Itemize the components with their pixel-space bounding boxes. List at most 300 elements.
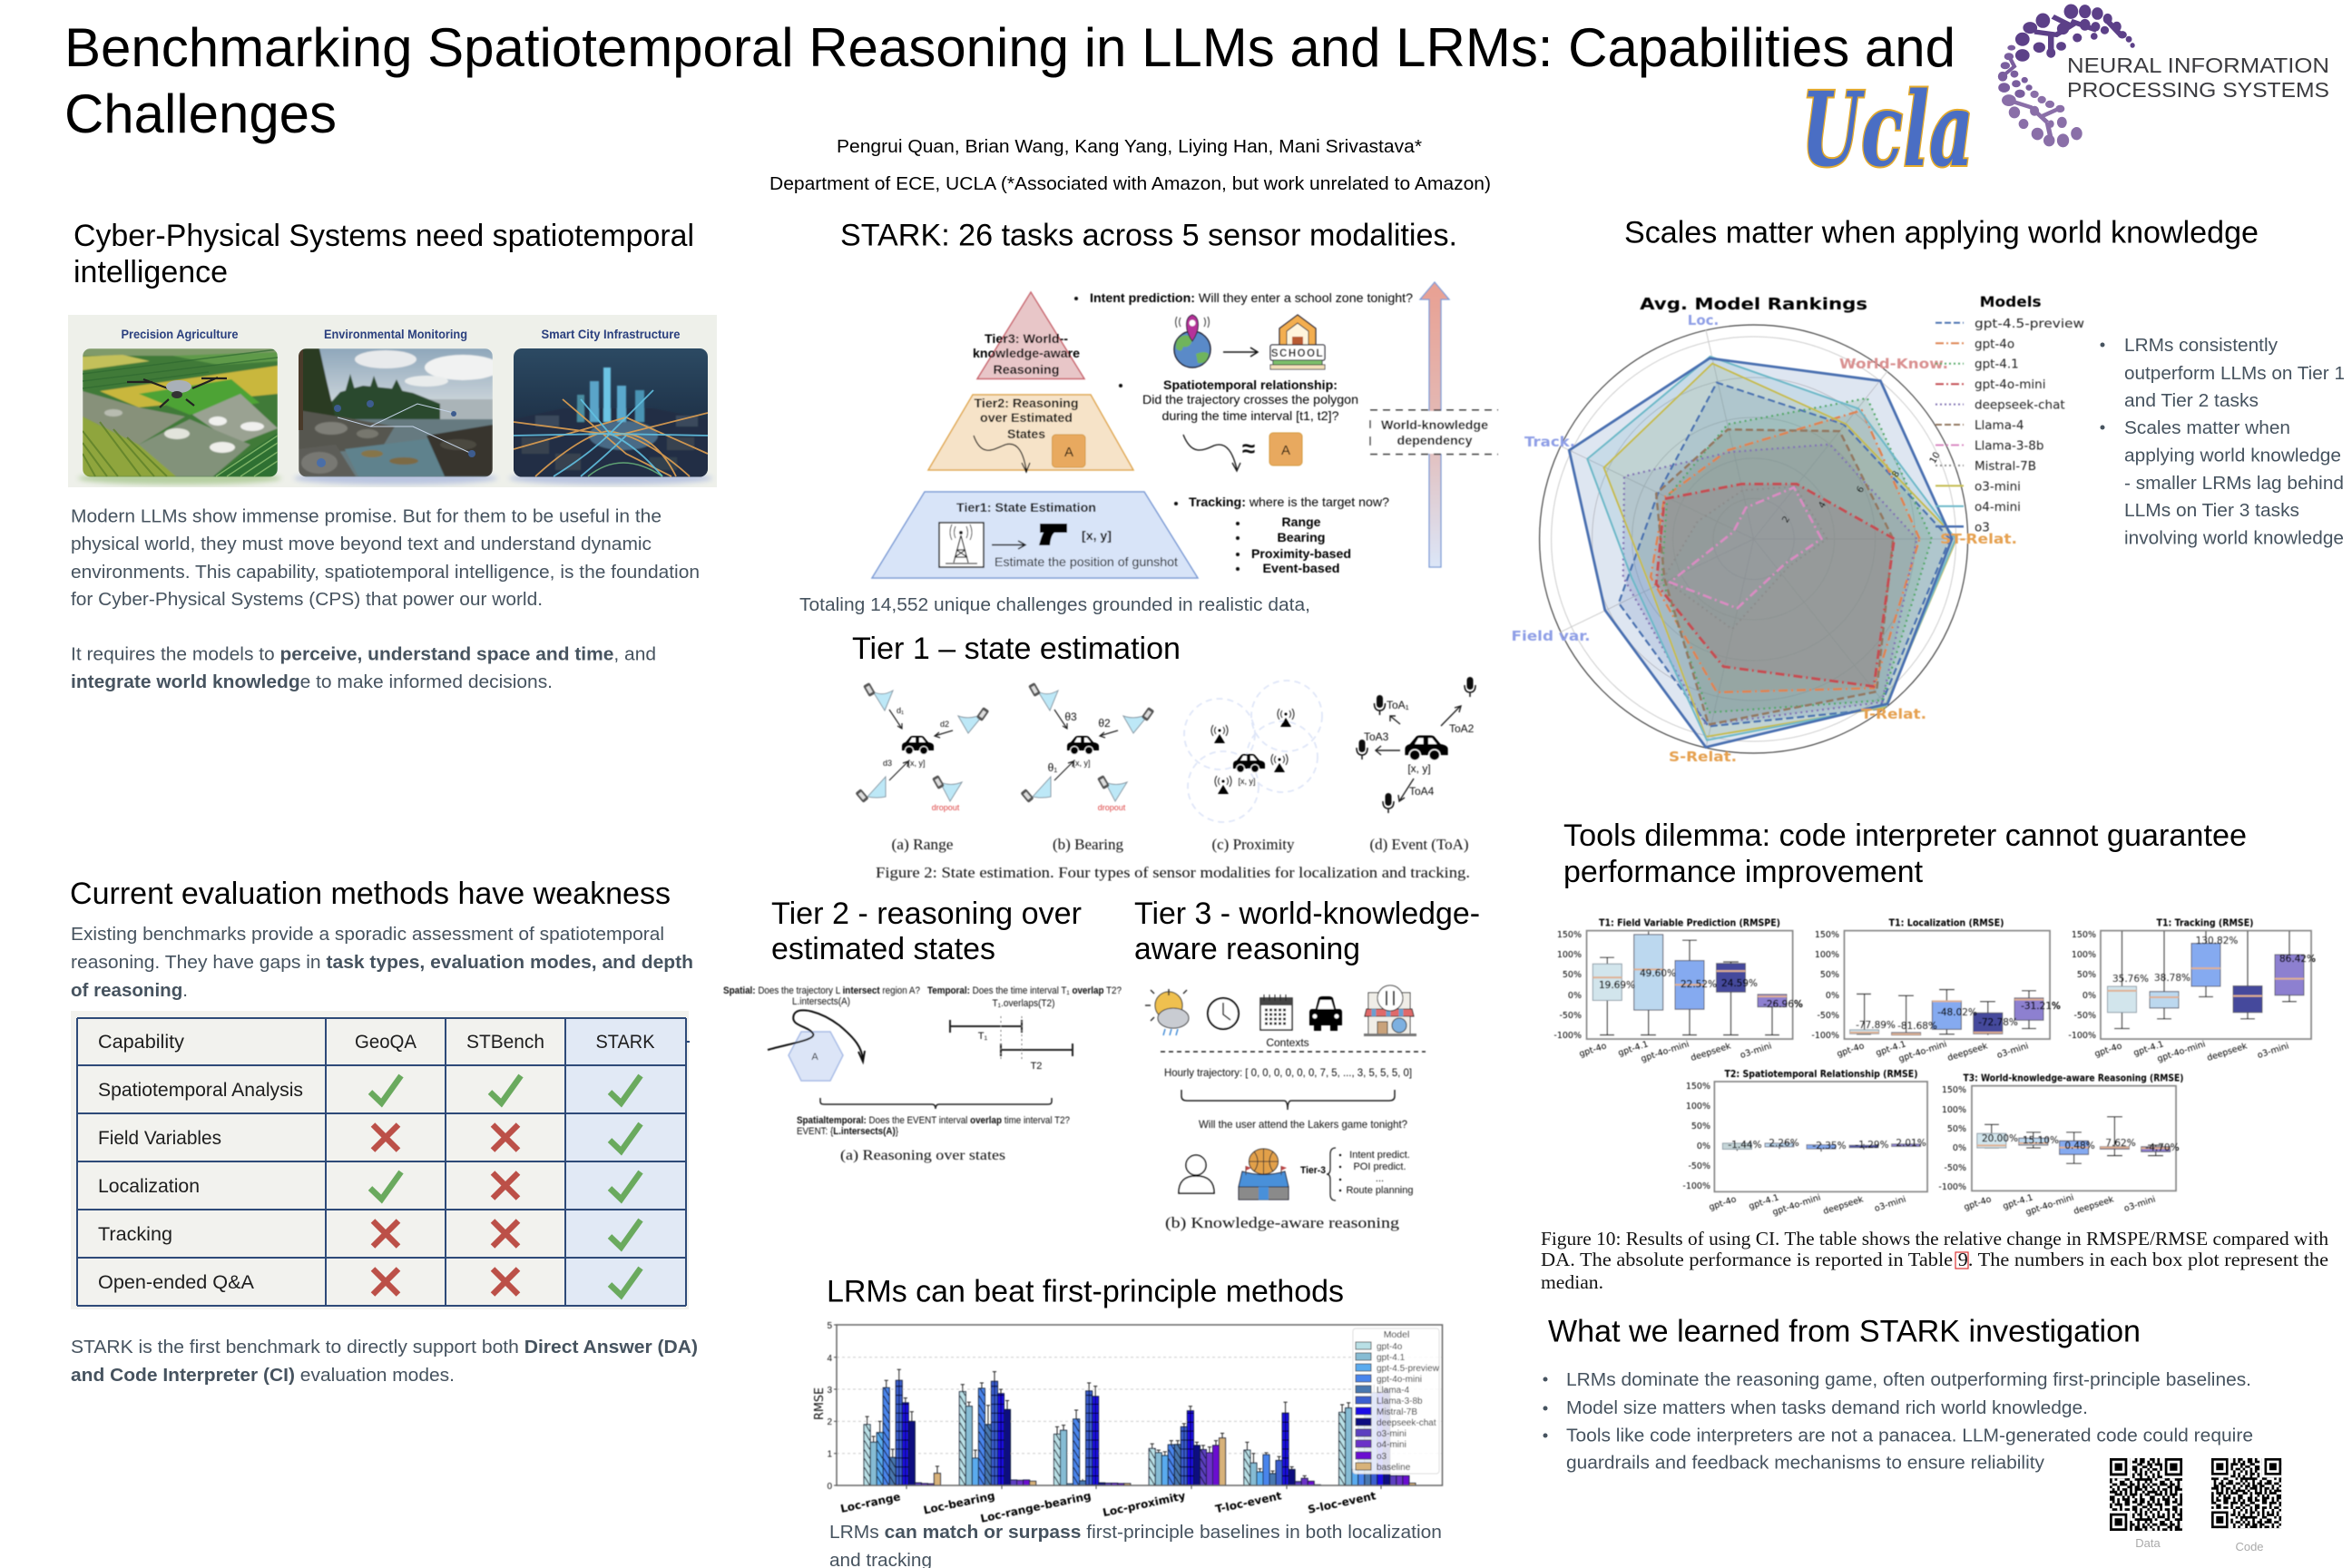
- tracking list: Event-based: [1263, 561, 1339, 575]
- box plot: T1 field variable: T1: Field Variable Prediction (RMSPE): [1599, 917, 1780, 929]
- chart legend: o3: [1377, 1452, 1387, 1462]
- chart legend: baseline: [1377, 1463, 1411, 1473]
- icon: clock: [1208, 998, 1239, 1029]
- axis labels: [1512, 312, 2017, 765]
- bullets: lessons learned: LRMs dominate the reasoning game, often outperforming first-principle baselines.: [1566, 1370, 2251, 1390]
- legend: models: deepseek-chat: [1975, 398, 2065, 413]
- box plot: T2 spatiotemporal relationship: 50%: [1691, 1122, 1710, 1132]
- box plot: T1 localization: 50%: [1820, 970, 1839, 980]
- box plot: T2 spatiotemporal relationship: o3-mini: [1873, 1194, 1907, 1214]
- axis labels: World-Know.: [1839, 356, 1948, 372]
- body text: modern LLMs: It requires the models to perceive, understand space and time , and: [71, 644, 656, 664]
- diagram: range: d3: [883, 759, 892, 768]
- icon: trajectory approximates region: A: [1281, 443, 1290, 458]
- brace and spatiotemporal question: Spatialtemporal: Does the EVENT interval overlap time interval T2?: [797, 1115, 1070, 1126]
- body text: STARK is the first: STARK is the first benchmark to directly support both Direct Answer (DA): [71, 1338, 698, 1357]
- legend: models: gpt-4o: [1975, 337, 2014, 351]
- box plot: T2 spatiotemporal relationship: gpt-4o: [1708, 1194, 1738, 1212]
- diagram: bearing: θ₁: [1048, 761, 1057, 774]
- heading: Tier 2: [771, 897, 1082, 966]
- tracking list: [1174, 495, 1389, 575]
- box plot: T1 tracking: 50%: [2077, 970, 2096, 980]
- tracking list: Range: [1281, 514, 1321, 529]
- tier 2 trapezoid: A: [1064, 445, 1073, 460]
- authors and affiliation: Pengrui Quan, Brian Wang, Kang Yang, Liying Han, Mani Srivastava*: [837, 137, 1422, 157]
- body text: existing benchmarks: of reasoning.: [71, 981, 188, 1001]
- box plot: T2 spatiotemporal relationship: -1.29%: [1855, 1140, 1889, 1151]
- body text: existing benchmarks: [71, 925, 693, 1001]
- photo: precision agriculture: [83, 348, 278, 477]
- box plot: T1 localization: 150%: [1815, 930, 1839, 940]
- heading: STARK: STARK: 26 tasks across 5 sensor modalities.: [840, 218, 1457, 252]
- radar chart: average model rankings: [1512, 293, 2084, 765]
- chart axes: Loc-range: [839, 1490, 902, 1515]
- icon: trajectory approximates region: [1183, 433, 1302, 471]
- box plot: T2 spatiotemporal relationship: [1682, 1068, 1927, 1218]
- question: Will the user attend the Lakers game tonight?: [1199, 1118, 1407, 1131]
- tier-3 list: Route planning: [1346, 1185, 1414, 1196]
- chart axes: 0: [827, 1482, 832, 1492]
- temporal question: T₁: [978, 1031, 988, 1042]
- tier 2 trapezoid: [928, 395, 1133, 472]
- table row labels: Spatiotemporal Analysis: [98, 1080, 303, 1101]
- body text: STARK is the first: [71, 1338, 698, 1386]
- icon: restaurant: [1364, 985, 1416, 1036]
- legend: models: gpt-4o-mini: [1975, 377, 2045, 392]
- figure: reasoning over states: [723, 985, 1122, 1163]
- title: [64, 17, 1955, 144]
- body text: existing benchmarks: Existing benchmarks provide a sporadic assessment of spatiotemporal: [71, 925, 664, 945]
- chart axes: 5: [827, 1321, 832, 1331]
- brace and spatiotemporal question: [797, 1098, 1070, 1137]
- icon: trajectory approximates region: ≈: [1242, 435, 1255, 462]
- panel: Tier 3: [1134, 897, 1480, 1231]
- box plot: T3 world-knowledge-aware reasoning: 7.62%: [2105, 1138, 2136, 1149]
- icon: globe with pin: [1174, 315, 1210, 368]
- box plot: T1 field variable: 100%: [1557, 950, 1582, 960]
- bullets: lessons learned: Model size matters when tasks demand rich world knowledge.: [1566, 1398, 2088, 1418]
- spatiotemporal relationship text: during the time interval [t1, t2]?: [1161, 408, 1339, 423]
- tier-3 list: ...: [1376, 1173, 1384, 1184]
- box plot: T1 field variable: 22.52%: [1681, 979, 1717, 990]
- title: Challenges: [64, 83, 337, 144]
- panel: What we learned: [1543, 1314, 2281, 1553]
- bars: groups: [864, 1369, 1416, 1485]
- box plot: T1 tracking: [2068, 917, 2316, 1064]
- heading: current evaluation methods: Current evaluation methods have weakness: [70, 877, 671, 911]
- box plot: T1 localization: -81.68%: [1897, 1021, 1937, 1032]
- table marks: check and cross icons: [370, 1076, 641, 1296]
- box plot: T1 localization: T1: Localization (RMSE): [1889, 917, 2004, 929]
- box plot: T1 field variable: -26.96%: [1763, 999, 1803, 1010]
- panel: Tier 1 state estimation: [852, 632, 1475, 881]
- icon: school: SCHOOL: [1271, 348, 1324, 359]
- box plot: T1 field variable: 19.69%: [1599, 980, 1635, 991]
- diagram: proximity: [1184, 681, 1322, 822]
- legend: models: [1936, 293, 2084, 534]
- radial ticks: 10: [1928, 450, 1943, 466]
- bullets: lessons learned: guardrails and feedback mechanisms to ensure reliability: [1566, 1454, 2044, 1474]
- radial ticks: 8: [1890, 469, 1902, 479]
- tier 2 trapezoid: Tier2: Reasoning: [975, 396, 1078, 410]
- box plot: T3 world-knowledge-aware reasoning: 20.00%: [1982, 1133, 2018, 1144]
- radial ticks: 2: [1780, 514, 1792, 524]
- box plot: T1 tracking: 38.78%: [2154, 973, 2190, 984]
- legend: models: o3: [1975, 520, 1990, 534]
- body text: existing benchmarks: reasoning. They have gaps in task types, evaluation modes, and depth: [71, 953, 693, 973]
- figure 10 caption: median.: [1541, 1271, 1603, 1293]
- heading: Tier 3: aware reasoning: [1134, 932, 1360, 966]
- photo: environmental monitoring: [299, 348, 501, 477]
- body text: modern LLMs: [71, 506, 700, 692]
- caption (b): (b) Knowledge-aware reasoning: [1165, 1214, 1400, 1231]
- arrow: world-knowledge dependency: [1366, 282, 1502, 567]
- diagram: range: dropout: [932, 803, 960, 812]
- box plot: T2 spatiotemporal relationship: -50%: [1688, 1161, 1710, 1171]
- box plot: T1 localization: -31.21%: [2021, 1001, 2061, 1012]
- table row labels: Tracking: [98, 1224, 172, 1245]
- bar chart: RMSE by task: [813, 1321, 1443, 1525]
- icon: calendar: [1260, 995, 1292, 1030]
- box plot: T3 world-knowledge-aware reasoning: 50%: [1947, 1124, 1966, 1134]
- QR code: data: [2110, 1458, 2182, 1550]
- chart axes: Loc-proximity: [1102, 1489, 1187, 1519]
- spatial question: A: [811, 1052, 818, 1063]
- bullets: LRM takeaways: and Tier 2 tasks: [2124, 391, 2259, 411]
- box plot: T3 world-knowledge-aware reasoning: gpt-4o: [1963, 1194, 1993, 1212]
- legend: models: Llama-3-8b: [1975, 439, 2043, 454]
- box plot: T3 world-knowledge-aware reasoning: gpt-4.1: [2002, 1192, 2034, 1211]
- heading: tools dilemma: Tools dilemma: code interpreter cannot guarantee: [1563, 818, 2247, 853]
- photo: smart city: [514, 348, 708, 477]
- box plot: T2 spatiotemporal relationship: -1.44%: [1728, 1140, 1762, 1151]
- image strip: CPS applications: Precision Agriculture: [122, 328, 239, 341]
- chart axes: T-loc-event: [1214, 1489, 1283, 1515]
- body text: modern LLMs: environments. This capability, spatiotemporal intelligence, is the foundation: [71, 563, 700, 583]
- box plot: T2 spatiotemporal relationship: -2.35%: [1812, 1141, 1847, 1152]
- heading: scales matter: Scales matter when applying world knowledge: [1624, 216, 2259, 250]
- figure 10 caption: [1541, 1228, 2329, 1293]
- figure 10 caption: Figure 10: Results of using CI. The table shows the relative change in RMSPE/RMSE compared with: [1541, 1228, 2329, 1250]
- icon: stadium with basketball: [1239, 1149, 1289, 1200]
- axis labels: Loc.: [1688, 312, 1719, 328]
- QR code: code: [2211, 1458, 2281, 1553]
- body text: LRMs can match: LRMs can match or surpass first-principle baselines in both localization: [829, 1523, 1442, 1543]
- brace: [1181, 1090, 1395, 1110]
- temporal question: Temporal: Does the time interval T₁ overlap T2?: [927, 985, 1122, 996]
- panel: STARK tasks: [799, 218, 1502, 615]
- heading: Tier 3: Tier 3 - world-knowledge-: [1134, 897, 1480, 931]
- box plot: T1 field variable: gpt-4o-mini: [1640, 1039, 1690, 1064]
- chart legend: Llama-3-8b: [1377, 1396, 1423, 1406]
- sub-captions: (d) Event (ToA): [1370, 836, 1468, 853]
- authors and affiliation: Department of ECE, UCLA (*Associated with Amazon, but work unrelated to Amazon): [769, 174, 1491, 194]
- box plot: T3 world-knowledge-aware reasoning: 150%: [1942, 1085, 1966, 1095]
- tier-3 list: Intent predict.: [1349, 1150, 1410, 1161]
- table header: STARK: [595, 1032, 655, 1053]
- box plot: T2 spatiotemporal relationship: 0%: [1697, 1142, 1710, 1152]
- box plot: T1 tracking: gpt-4o: [2093, 1041, 2123, 1059]
- box plot: T2 spatiotemporal relationship: gpt-4o-mini: [1771, 1192, 1822, 1218]
- chart legend: Mistral-7B: [1377, 1407, 1417, 1417]
- comparison table: [71, 1011, 690, 1309]
- box plot: T1 tracking: 150%: [2072, 930, 2096, 940]
- diagram: range: d2: [940, 720, 949, 729]
- bullets: LRM takeaways: involving world knowledge: [2124, 528, 2344, 548]
- legend: models: gpt-4.1: [1975, 358, 2019, 372]
- box plot: T1 field variable: 49.60%: [1640, 968, 1676, 979]
- heading: what we learned: What we learned from STARK investigation: [1548, 1314, 2141, 1348]
- bullets: LRM takeaways: LLMs on Tier 3 tasks: [2124, 501, 2299, 521]
- box plot: T3 world-knowledge-aware reasoning: 0%: [1953, 1143, 1966, 1153]
- box plot: T3 world-knowledge-aware reasoning: 0.48%: [2064, 1141, 2095, 1152]
- box plot: T1 localization: -100%: [1811, 1031, 1839, 1041]
- chart legend: Llama-4: [1377, 1386, 1410, 1396]
- diagram: bearing: dropout: [1098, 803, 1126, 812]
- hourly trajectory: Hourly trajectory: [ 0, 0, 0, 0, 0, 0, 7, 5, ..., 3, 5, 5, 5, 0]: [1164, 1066, 1412, 1079]
- diagram: bearing: [1020, 682, 1154, 812]
- box plot: T1 localization: [1811, 917, 2061, 1064]
- box plot: T1 localization: gpt-4o: [1836, 1041, 1866, 1059]
- diagram: three tier pyramid: [872, 282, 1502, 578]
- table row labels: Localization: [98, 1176, 200, 1197]
- box plot: T1 localization: -48.02%: [1937, 1007, 1977, 1018]
- figure 2 caption: Figure 2: State estimation. Four types of sensor modalities for localization and tracking.: [876, 864, 1470, 881]
- diagram: range: d₁: [897, 706, 904, 715]
- box plot: T2 spatiotemporal relationship: 100%: [1686, 1102, 1710, 1112]
- box plot: T2 spatiotemporal relationship: 2.26%: [1769, 1138, 1799, 1149]
- title: Benchmarking Spatiotemporal Reasoning in LLMs and LRMs: Capabilities and: [64, 17, 1955, 78]
- temporal question: T₁.overlaps(T2): [993, 998, 1054, 1009]
- box plot: T3 world-knowledge-aware reasoning: o3-mini: [2122, 1194, 2157, 1214]
- box plot: T2 spatiotemporal relationship: gpt-4.1: [1748, 1192, 1780, 1211]
- tracking list: Bearing: [1278, 530, 1325, 544]
- tier-3 list: Tier-3: [1300, 1165, 1326, 1176]
- diagram: bearing: θ3: [1064, 710, 1077, 723]
- table header: GeoQA: [355, 1032, 416, 1053]
- panel: Tier 2: [723, 897, 1122, 1163]
- authors and affiliation: [769, 137, 1491, 194]
- bullets: LRM takeaways: - smaller LRMs lag behind: [2124, 474, 2344, 494]
- table header: Capability: [98, 1032, 185, 1053]
- contexts label: Contexts: [1266, 1036, 1309, 1049]
- chart title: Avg. Model Rankings: [1640, 295, 1867, 314]
- box plot: T1 tracking: 130.82%: [2196, 936, 2238, 946]
- tier 1 trapezoid: [x, y]: [1082, 528, 1112, 543]
- spatial question: [723, 985, 920, 1081]
- box plot: T3 world-knowledge-aware reasoning: 15.10%: [2023, 1135, 2059, 1146]
- box plot: T3 world-knowledge-aware reasoning: 100%: [1942, 1105, 1966, 1115]
- box plot: T1 field variable: -50%: [1559, 1011, 1582, 1021]
- tier 2 trapezoid: States: [1007, 426, 1045, 441]
- icon: car: [1309, 996, 1342, 1031]
- box plot: T1 localization: deepseek: [1946, 1041, 1989, 1063]
- QR code: data: Data: [2135, 1536, 2161, 1550]
- box plot: T1 localization: -77.89%: [1856, 1020, 1896, 1031]
- box plot: T1 tracking: -50%: [2073, 1011, 2096, 1021]
- chart axes: S-loc-event: [1307, 1489, 1377, 1516]
- tier 3 triangle: knowledge-aware: [973, 346, 1080, 360]
- box plot: T1 localization: o3-mini: [1995, 1041, 2030, 1061]
- tier 1 trapezoid: Tier1: State Estimation: [956, 500, 1096, 514]
- chart legend: deepseek-chat: [1377, 1418, 1436, 1428]
- icon: school: [1270, 315, 1325, 369]
- chart axes: 2: [827, 1417, 832, 1427]
- chart legend: gpt-4.1: [1377, 1353, 1406, 1363]
- box plot: T1 field variable: gpt-4.1: [1617, 1039, 1650, 1058]
- heading: cyber-physical systems: [74, 219, 694, 289]
- box plot: T3 world-knowledge-aware reasoning: gpt-4o-mini: [2024, 1192, 2075, 1218]
- tier 1 trapezoid: [872, 492, 1198, 578]
- box plot: T1 localization: gpt-4.1: [1875, 1039, 1907, 1058]
- box plot: T1 tracking: deepseek: [2206, 1041, 2249, 1063]
- box plot: T1 field variable: [1553, 917, 1803, 1064]
- diagram: range: [x, y]: [907, 759, 926, 768]
- box plot: T3 world-knowledge-aware reasoning: -100%: [1938, 1182, 1966, 1192]
- sub-captions: [891, 836, 1468, 853]
- table header: [98, 1032, 655, 1053]
- icon: person: [1179, 1155, 1214, 1193]
- sub-captions: (a) Range: [891, 836, 953, 853]
- chart legend: gpt-4o: [1377, 1342, 1403, 1352]
- chart legend: gpt-4o-mini: [1377, 1375, 1422, 1385]
- text: totaling challenges: Totaling 14,552 unique challenges grounded in realistic data,: [799, 595, 1310, 615]
- radar polygons: [1569, 357, 1956, 747]
- logo: NeurIPS: PROCESSING SYSTEMS: [2067, 78, 2329, 102]
- box plot: T1 localization: 100%: [1815, 950, 1839, 960]
- box plot: T2 spatiotemporal relationship: 150%: [1686, 1082, 1710, 1092]
- diagram: event ToA: [x, y]: [1407, 762, 1431, 775]
- panel: Scales matter: [1512, 216, 2345, 765]
- bullets: LRM takeaways: [2100, 336, 2345, 548]
- temporal question: [927, 985, 1122, 1072]
- temporal question: T2: [1031, 1061, 1042, 1072]
- axis labels: T-Relat.: [1861, 706, 1926, 722]
- table header: STBench: [466, 1032, 544, 1053]
- radial ticks: 6: [1855, 485, 1867, 495]
- legend: models: o3-mini: [1975, 479, 2021, 494]
- box plot: T2 spatiotemporal relationship: T2: Spatiotemporal Relationship (RMSE): [1724, 1068, 1918, 1080]
- table row labels: Field Variables: [98, 1128, 221, 1149]
- tier-3 list: POI predict.: [1353, 1161, 1406, 1172]
- panel: LRMs can beat first-principle methods: [813, 1274, 1443, 1568]
- chart legend: [1353, 1328, 1440, 1474]
- diagram: event ToA: [1357, 677, 1475, 813]
- box plot: T1 field variable: -100%: [1553, 1031, 1582, 1041]
- body text: LRMs can match: [829, 1523, 1442, 1568]
- box plot: T1 tracking: gpt-4.1: [2132, 1039, 2165, 1058]
- tier 3 triangle: [973, 292, 1084, 379]
- diagram: event ToA: ToA₁: [1387, 699, 1409, 711]
- box plot: T1 localization: 0%: [1826, 991, 1839, 1001]
- sub-captions: (c) Proximity: [1212, 836, 1295, 853]
- arrow: world-knowledge dependency: dependency: [1397, 433, 1473, 447]
- box plot: T1 tracking: 0%: [2082, 991, 2096, 1001]
- heading: Tier 2: Tier 2 - reasoning over: [771, 897, 1082, 931]
- chart legend: Model: [1384, 1329, 1409, 1340]
- box plot: T1 field variable: o3-mini: [1739, 1041, 1773, 1061]
- legend: models: Llama-4: [1975, 418, 2024, 433]
- tier 1 trapezoid: Estimate the position of gunshot: [995, 554, 1178, 569]
- tier 3 triangle: Reasoning: [993, 362, 1060, 377]
- box plot: T1 tracking: o3-mini: [2256, 1041, 2290, 1061]
- box plot: T1 field variable: gpt-4o: [1578, 1041, 1608, 1059]
- diagram: bearing: [x, y]: [1073, 759, 1091, 768]
- box plot: T1 localization: -50%: [1817, 1011, 1839, 1021]
- intent prediction text: Intent prediction: Will they enter a school zone tonight?: [1090, 290, 1413, 305]
- QR code: code: Code: [2235, 1540, 2264, 1553]
- chart axes: 4: [827, 1354, 832, 1364]
- spatiotemporal relationship text: Did the trajectory crosses the polygon: [1142, 392, 1358, 407]
- diagram: range: [855, 682, 989, 812]
- box plot: T2 spatiotemporal relationship: -100%: [1682, 1181, 1710, 1191]
- sub-captions: (b) Bearing: [1053, 836, 1123, 853]
- box plot: T3 world-knowledge-aware reasoning: deepseek: [2073, 1194, 2115, 1217]
- box plot: T1 field variable: deepseek: [1690, 1041, 1732, 1063]
- heading: cyber-physical systems: intelligence: [74, 255, 228, 289]
- figure: knowledge-aware reasoning: [1145, 985, 1426, 1231]
- logo: NeurIPS: NEURAL INFORMATION: [2067, 54, 2329, 77]
- arrow: world-knowledge dependency: World-knowledge: [1381, 417, 1488, 432]
- tracking list: Tracking: where is the target now?: [1189, 495, 1389, 509]
- axis labels: S-Relat.: [1669, 749, 1737, 765]
- image strip: CPS applications: [68, 315, 717, 487]
- box plot: T1 tracking: T1: Tracking (RMSE): [2156, 917, 2254, 929]
- caption (a): (a) Reasoning over states: [840, 1148, 1005, 1163]
- bullets: LRM takeaways: LRMs consistently: [2124, 336, 2278, 356]
- radial ticks: [1780, 450, 1943, 524]
- legend: models: Mistral-7B: [1975, 459, 2036, 474]
- axis labels: Field var.: [1512, 628, 1590, 644]
- icon: weather: [1145, 989, 1189, 1035]
- brace and spatiotemporal question: EVENT: {L.intersects(A)}: [797, 1126, 898, 1137]
- figure: four sensor modalities: [855, 677, 1475, 881]
- bullets: lessons learned: Tools like code interpreters are not a panacea. LLM-generated code could require: [1566, 1426, 2253, 1446]
- spatiotemporal relationship text: [1119, 377, 1358, 423]
- chart axes: Loc-range-bearing: [979, 1489, 1093, 1525]
- bullets: LRM takeaways: Scales matter when: [2124, 418, 2290, 438]
- box plot: T2 spatiotemporal relationship: deepseek: [1822, 1194, 1865, 1217]
- logo: UCLA: Ucla: [1801, 71, 1974, 190]
- spatial question: Spatial: Does the trajectory L intersect region A?: [723, 985, 920, 996]
- logo: NeurIPS: [1999, 5, 2329, 147]
- chart axes: [813, 1321, 1443, 1525]
- chart legend: o4-mini: [1377, 1440, 1406, 1450]
- box plot: T3 world-knowledge-aware reasoning: -50%: [1944, 1163, 1966, 1173]
- box plot: T1 field variable: 50%: [1563, 970, 1582, 980]
- panel: current evaluation methods: [70, 877, 698, 1386]
- figure 10 caption: DA. The absolute performance is reported in Table 9. The numbers in each box plot represent the: [1541, 1249, 2328, 1270]
- panel: Tools dilemma: [1541, 818, 2329, 1293]
- chart legend: o3-mini: [1377, 1429, 1406, 1439]
- axis labels: Track.: [1524, 434, 1575, 450]
- box plot: T1 localization: -72.78%: [1978, 1017, 2018, 1028]
- heading: Tier 3: [1134, 897, 1480, 966]
- spatial question: L.intersects(A): [792, 996, 850, 1007]
- axis labels: ST-Relat.: [1940, 531, 2017, 547]
- tier 2 trapezoid: over Estimated: [980, 410, 1073, 425]
- heading: Tier 1: Tier 1 – state estimation: [852, 632, 1181, 666]
- heading: tools dilemma: [1563, 818, 2247, 889]
- chart axes: 3: [827, 1386, 832, 1396]
- legend: models: gpt-4.5-preview: [1975, 317, 2084, 331]
- tracking list: Proximity-based: [1251, 546, 1351, 561]
- image strip: CPS applications: Environmental Monitoring: [324, 328, 467, 341]
- table row labels: Open-ended Q&A: [98, 1272, 254, 1293]
- radar grid: [1540, 325, 1968, 753]
- diagram: event ToA: ToA2: [1449, 722, 1475, 735]
- chart legend: gpt-4.5-preview: [1377, 1364, 1440, 1374]
